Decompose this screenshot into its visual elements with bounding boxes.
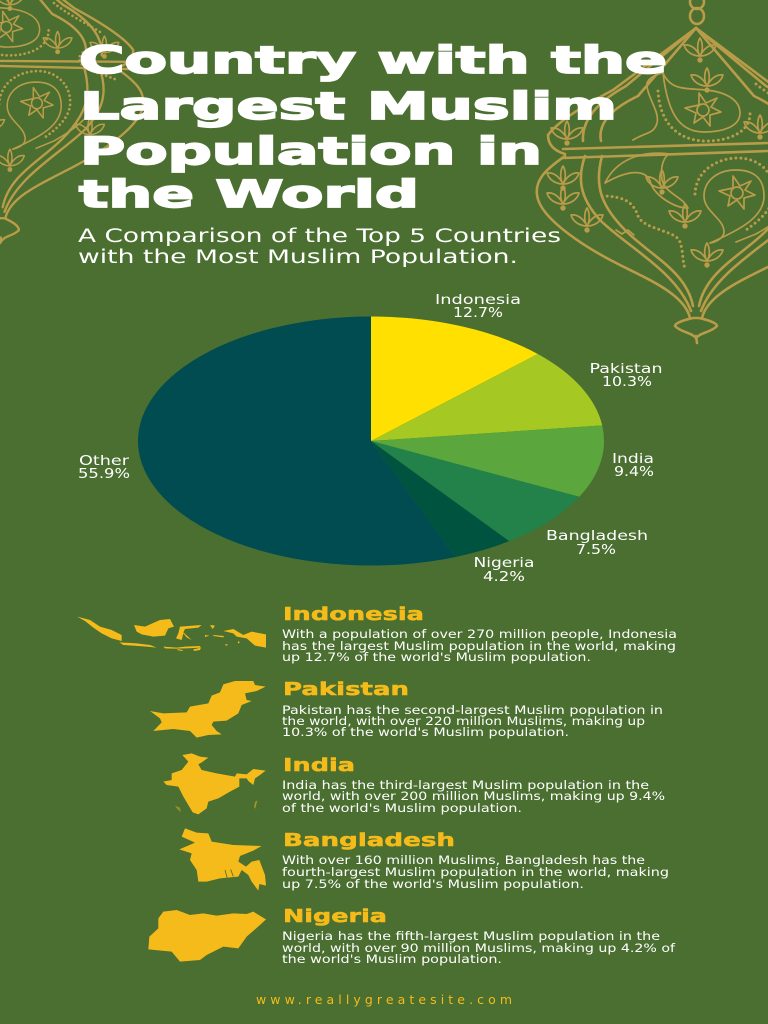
pie label: Other: 55.9% xyxy=(78,466,130,482)
heading and text: Bangladesh xyxy=(282,831,669,891)
heading and text: Pakistan: the world, with over 220 million Muslims, making up xyxy=(282,714,645,728)
slice: India xyxy=(371,425,604,497)
icon: map of Pakistan xyxy=(150,681,266,738)
pie label: Other: Other xyxy=(79,453,130,469)
slice: Nigeria xyxy=(371,441,509,557)
icon: map of Nigeria xyxy=(148,910,266,962)
heading and text: India: of the world's Muslim population. xyxy=(282,801,522,815)
title: the World xyxy=(79,173,419,216)
pie label: Bangladesh: 7.5% xyxy=(576,542,616,558)
footer website: www.reallygreatesite.com xyxy=(256,992,512,1007)
pie label: Bangladesh xyxy=(546,528,648,558)
pie label: Nigeria xyxy=(474,555,534,585)
slice: Bangladesh xyxy=(371,441,579,541)
icon: left ornamental lamp xyxy=(0,0,143,243)
heading and text: India: India xyxy=(283,756,355,776)
heading and text: Indonesia: With a population of over 270 million people, Indonesia xyxy=(282,627,677,641)
heading and text: India: India has the third-largest Muslim population in the xyxy=(282,778,649,792)
icon: map of Bangladesh xyxy=(179,828,266,891)
pie label: Pakistan: Pakistan xyxy=(590,361,662,377)
pie label: India: 9.4% xyxy=(614,464,654,480)
slice: Indonesia xyxy=(371,316,538,441)
heading and text: Bangladesh: Bangladesh xyxy=(283,831,455,851)
pie label: Nigeria: Nigeria xyxy=(474,555,534,571)
pie label: Indonesia xyxy=(435,292,521,321)
pie label: Other xyxy=(78,453,130,482)
pie label: Nigeria: 4.2% xyxy=(483,569,525,585)
heading and text: Nigeria: world, with over 90 million Muslims, making up 4.2% of xyxy=(282,941,676,955)
icon: map of India xyxy=(163,753,266,815)
subtitle xyxy=(78,226,561,268)
heading and text: Indonesia: up 12.7% of the world's Muslim population. xyxy=(282,650,591,664)
title: Largest Muslim xyxy=(80,85,617,128)
title: Country with the xyxy=(79,39,667,82)
heading and text: Indonesia: has the largest Muslim population in the world, making xyxy=(282,639,676,653)
heading and text: Pakistan: Pakistan has the second-largest Muslim population in xyxy=(282,703,663,717)
pie label: Indonesia: Indonesia xyxy=(435,292,521,308)
heading and text: Bangladesh: With over 160 million Muslims, Bangladesh has the xyxy=(282,853,645,867)
heading and text: Pakistan: 10.3% of the world's Muslim population. xyxy=(282,725,569,739)
icon: map of Indonesia xyxy=(77,617,266,651)
pie chart xyxy=(138,316,604,566)
pie label: India xyxy=(612,451,654,480)
pie label: Pakistan xyxy=(590,361,662,390)
title xyxy=(79,39,667,216)
slice: Pakistan xyxy=(371,354,602,441)
pie label: Bangladesh: Bangladesh xyxy=(546,528,648,544)
pie label: Indonesia: 12.7% xyxy=(453,305,503,321)
subtitle: A Comparison of the Top 5 Countries xyxy=(78,226,561,247)
title: Population in xyxy=(80,130,542,173)
pie label: Pakistan: 10.3% xyxy=(602,374,652,390)
heading and text: Nigeria: Nigeria xyxy=(283,907,387,927)
heading and text: Indonesia: Indonesia xyxy=(283,605,424,625)
subtitle: with the Most Muslim Population. xyxy=(78,247,518,268)
heading and text: Bangladesh: fourth-largest Muslim population in the world, making xyxy=(282,865,669,879)
heading and text: Nigeria: the world's Muslim population. xyxy=(282,952,502,966)
heading and text: Indonesia xyxy=(282,605,677,664)
slice: Other xyxy=(138,316,456,566)
heading and text: Pakistan xyxy=(282,680,663,739)
heading and text: Nigeria: Nigeria has the fifth-largest Muslim population in the xyxy=(282,929,660,943)
pie label: India: India xyxy=(612,451,654,467)
heading and text: Bangladesh: up 7.5% of the world's Muslim population. xyxy=(282,877,584,891)
heading and text: India xyxy=(282,756,665,815)
heading and text: Nigeria xyxy=(282,907,676,966)
icon: right ornamental lamp xyxy=(537,0,768,343)
heading and text: Pakistan: Pakistan xyxy=(283,680,409,700)
heading and text: India: world, with over 200 million Muslims, making up 9.4% xyxy=(282,789,665,803)
